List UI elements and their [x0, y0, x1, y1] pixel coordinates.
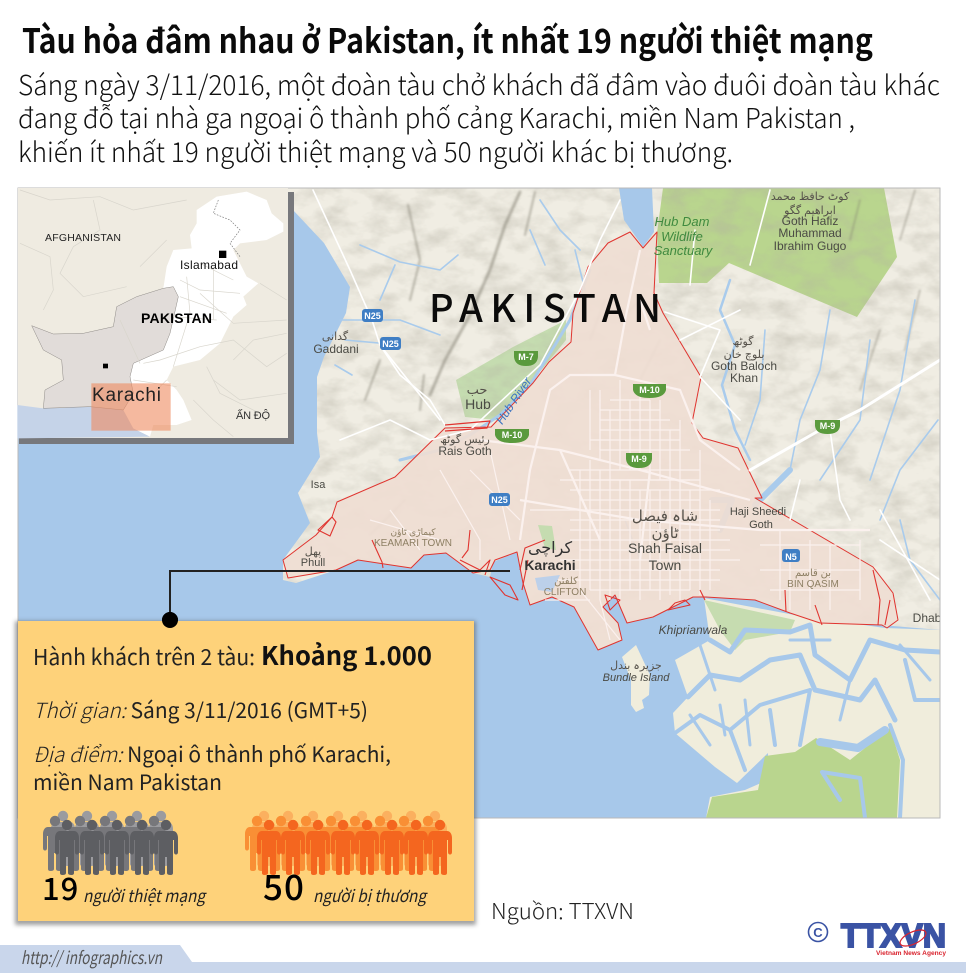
map place labels: Town: [649, 557, 681, 573]
inset map: ẤN ĐỘ: [236, 409, 270, 422]
map place labels: کوٹ حافظ محمد: [771, 191, 850, 203]
map place labels: Hub Dam: [655, 214, 710, 229]
inset map: Islamabad: [180, 258, 238, 272]
stat: 50: 50: [263, 860, 305, 911]
highway shields: [362, 309, 840, 562]
highway shields: N5: [785, 552, 797, 562]
highway shields: M-9: [631, 454, 647, 464]
Karachi district: [283, 232, 898, 650]
icon: injured people: [245, 811, 452, 875]
map place labels: Sanctuary: [654, 243, 714, 258]
highway shields: M-9: [820, 421, 835, 431]
map place labels: CLIFTON: [544, 587, 586, 598]
stat: 50: người bị thương: [313, 882, 428, 907]
highway shields: M-10: [639, 385, 660, 395]
city roads: [370, 250, 870, 640]
map place labels: Hub: [465, 396, 491, 412]
terrain shading: [280, 188, 940, 633]
map place labels: Isa: [311, 479, 326, 491]
map place labels: Wildlife: [661, 229, 703, 244]
stat: 19: 19: [42, 864, 79, 909]
time: Thời gian: Sáng 3/11/2016 (GMT+5): [33, 695, 368, 725]
map place labels: Gaddani: [313, 342, 359, 356]
map place labels: BIN QASIM: [787, 579, 839, 590]
map place labels: Goth Baloch: [711, 359, 777, 373]
location: [33, 739, 391, 797]
inset map: AFGHANISTAN: [45, 232, 121, 244]
map place labels: Goth: [749, 519, 773, 531]
map place labels: بن قاسم: [795, 568, 831, 579]
logo: TTXVN: [808, 917, 946, 957]
red coastal creeks: [318, 421, 890, 625]
map place labels: Ibrahim Gugo: [774, 239, 847, 253]
delta land: [673, 598, 940, 818]
main map: [18, 188, 942, 818]
map place labels: Karachi: [524, 557, 576, 573]
map place labels: Muhammad: [778, 226, 842, 240]
logo: TTXVN: TTXVN: [841, 917, 946, 954]
footer band: [0, 945, 966, 973]
map place labels: Phull: [301, 557, 325, 569]
intro text: đang đỗ tại nhà ga ngoại ô thành phố cảng Karachi, miền Nam Pakistan ,: [18, 96, 855, 136]
map place labels: Rais Goth: [438, 444, 492, 458]
inset map: PAKISTAN: [141, 310, 212, 326]
highway shields: M-7: [518, 352, 534, 362]
map place labels: Hub River: [493, 374, 535, 427]
passengers: Hành khách trên 2 tàu:: [33, 640, 255, 672]
map place labels: [301, 191, 942, 684]
map place labels: Goth Hafiz: [782, 214, 838, 228]
inset map: [17, 188, 294, 444]
intro text: Sáng ngày 3/11/2016, một đoàn tàu chở khách đã đâm vào đuôi đoàn tàu khác: [18, 63, 940, 103]
roads outside: [313, 190, 940, 600]
Hub Dam green: [657, 188, 897, 317]
label: PAKISTAN: PAKISTAN: [429, 278, 661, 333]
map place labels: بلوچ خان: [724, 349, 764, 361]
intro text: [18, 63, 940, 170]
map place labels: گدانی: [322, 330, 349, 343]
rivers: [335, 200, 940, 600]
location: Địa điểm: Ngoại ô thành phố Karachi,: [33, 739, 391, 769]
title: Tàu hỏa đâm nhau ở Pakistan, ít nhất 19 người thiệt mạng: [22, 14, 873, 63]
map place labels: Haji Sheedi: [730, 506, 786, 518]
map place labels: کراچی: [528, 540, 572, 558]
info panel: [15, 612, 476, 925]
icon: dead people: [43, 811, 178, 875]
map place labels: گوٹھ: [733, 335, 754, 348]
map place labels: Khan: [730, 371, 758, 385]
map place labels: Dhab: [913, 611, 942, 625]
location: miền Nam Pakistan: [33, 767, 222, 797]
Bundle Island: [622, 645, 650, 712]
connector line and dot: [162, 571, 510, 628]
highway shields: M-10: [502, 430, 522, 440]
parks in city: [538, 525, 556, 550]
map place labels: Khiprianwala: [659, 623, 728, 637]
map place labels: Bundle Island: [603, 672, 670, 684]
logo: TTXVN: C: [813, 925, 823, 940]
stat: 19: người thiệt mạng: [83, 882, 207, 907]
map place labels: جزیرہ بندل: [610, 660, 662, 672]
passengers: Khoảng 1.000: [261, 636, 432, 673]
map place labels: رئیس گوٹھ: [440, 433, 490, 446]
map place labels: KEAMARI TOWN: [374, 538, 452, 549]
map place labels: کیماڑی ٹاؤن: [390, 527, 436, 537]
reservoir: [619, 188, 654, 247]
delta channels: [675, 625, 940, 818]
wetland green: [704, 600, 795, 650]
highway shields: N25: [364, 311, 381, 321]
map place labels: ٹاؤن: [651, 525, 679, 542]
map place labels: ابراهیم گگو: [783, 204, 836, 217]
map place labels: Shah Faisal: [628, 540, 702, 556]
inset map: Karachi: [92, 385, 161, 406]
map place labels: پھل: [305, 546, 321, 558]
Hub green: [456, 320, 566, 420]
source: Nguồn: TTXVN: [491, 894, 634, 926]
logo: TTXVN: Vietnam News Agency: [876, 950, 946, 957]
highway shields: N25: [491, 495, 508, 505]
map place labels: شاہ فیصل: [632, 508, 698, 525]
map place labels: حب: [467, 382, 487, 397]
highway shields: N25: [382, 339, 399, 349]
stat: 50: [263, 860, 428, 911]
intro text: khiến ít nhất 19 người thiệt mạng và 50 người khác bị thương.: [18, 130, 733, 170]
land: [280, 188, 940, 650]
map place labels: کلفٹن: [554, 576, 578, 587]
footer band: http:// infographics.vn: [21, 945, 163, 970]
stat: 19: [42, 864, 207, 909]
